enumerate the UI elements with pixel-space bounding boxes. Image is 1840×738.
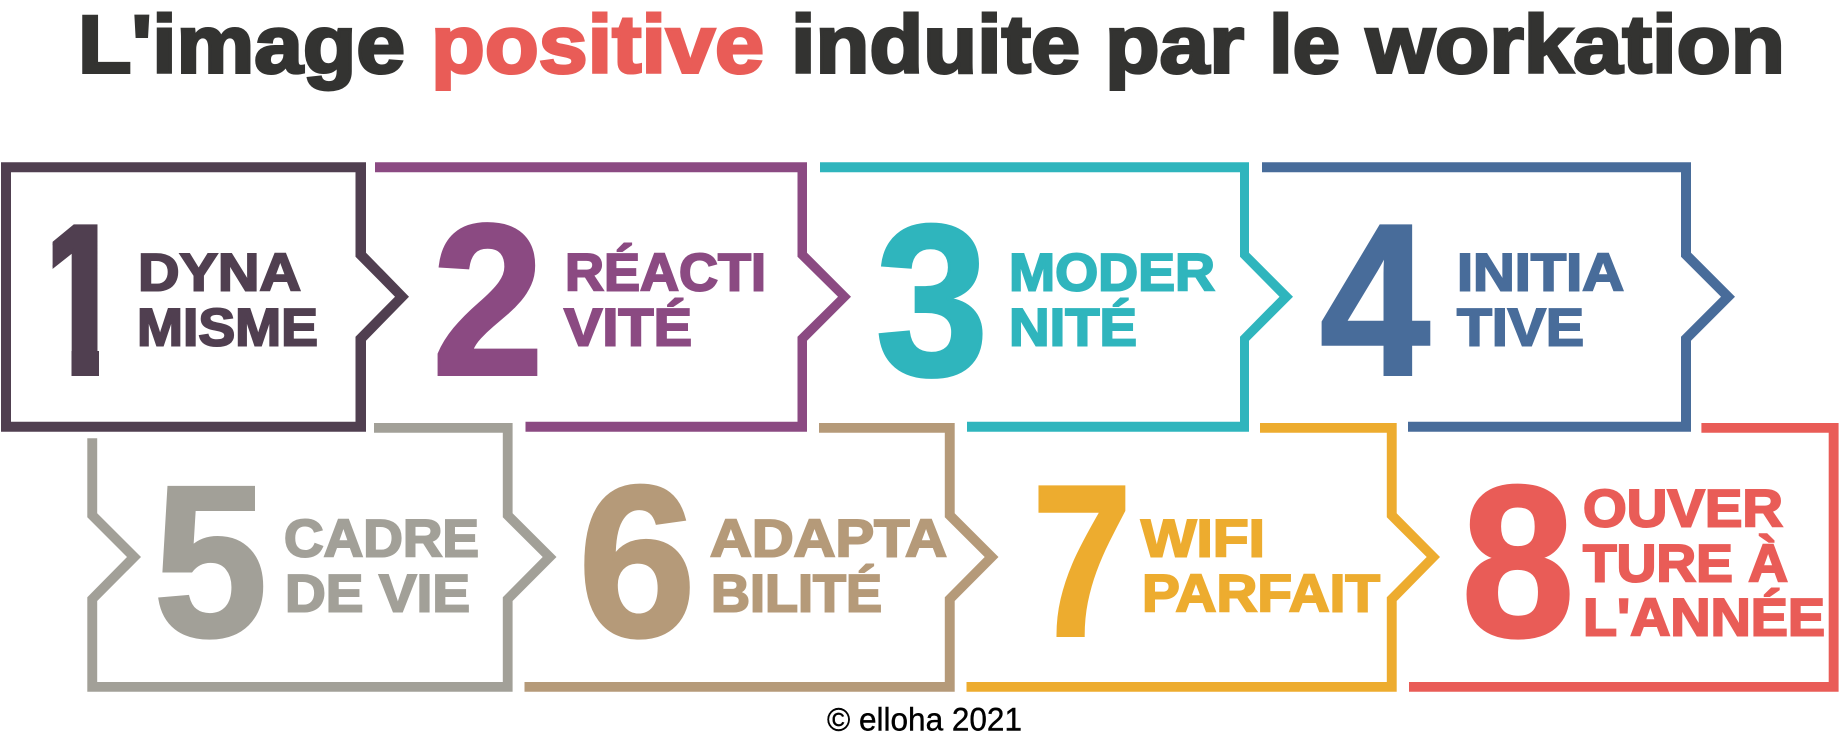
panel 5: cadre de vie [87,423,557,692]
panel 6: adaptabilité [524,423,998,692]
label: TIVE [1457,299,1584,358]
label [1457,244,1624,358]
outline [966,423,1440,692]
label: MISME [137,299,318,358]
title: le [1269,0,1340,90]
label: WIFI [1141,510,1265,569]
outline [87,423,557,692]
title: par [1105,0,1244,90]
number 6: 6 [578,440,696,682]
label: ADAPTA [710,510,947,569]
number 3: 3 [876,179,988,421]
label: INITIA [1457,244,1624,303]
label: PARFAIT [1142,565,1380,624]
label: VITÉ [564,298,692,358]
label: DE VIE [285,565,470,624]
label [137,244,318,358]
label [564,243,766,358]
label: RÉACTI [565,243,766,303]
outline [1,162,409,432]
outline [1409,423,1839,692]
label: TURE À [1583,534,1788,594]
panel 3: modernité [820,162,1293,432]
label [1009,244,1215,358]
label: DYNA [138,244,301,303]
number 4: 4 [1320,178,1430,420]
title: induite [791,0,1080,90]
label [1583,480,1825,648]
outline [375,162,851,432]
label [284,510,479,624]
footer credit: © elloha 2021 [827,702,1022,738]
label: OUVER [1583,480,1783,539]
number 2: 2 [432,178,544,420]
panel 7: wifi parfait [966,423,1440,692]
outline [524,423,998,692]
label [1141,510,1380,624]
number 7: 7 [1032,440,1132,682]
outline [1262,162,1735,432]
panel 8: ouverture à l'année [1409,423,1839,692]
label: BILITÉ [711,564,882,624]
panel 1: dynamisme [1,162,409,432]
title: workation [1365,0,1785,90]
label: L'ANNÉE [1583,588,1825,648]
number 8: 8 [1462,440,1574,682]
panel 4: initiative [1262,162,1735,432]
label [710,510,947,624]
panel 2: réactivité [375,162,851,432]
title [78,0,1785,90]
label: CADRE [284,510,479,569]
number 5: 5 [154,440,268,682]
title: positive [431,0,764,90]
label: NITÉ [1009,298,1137,358]
outline [820,162,1293,432]
title: L'image [78,0,405,90]
label: MODER [1009,244,1215,303]
number 1: 1 [33,178,128,420]
